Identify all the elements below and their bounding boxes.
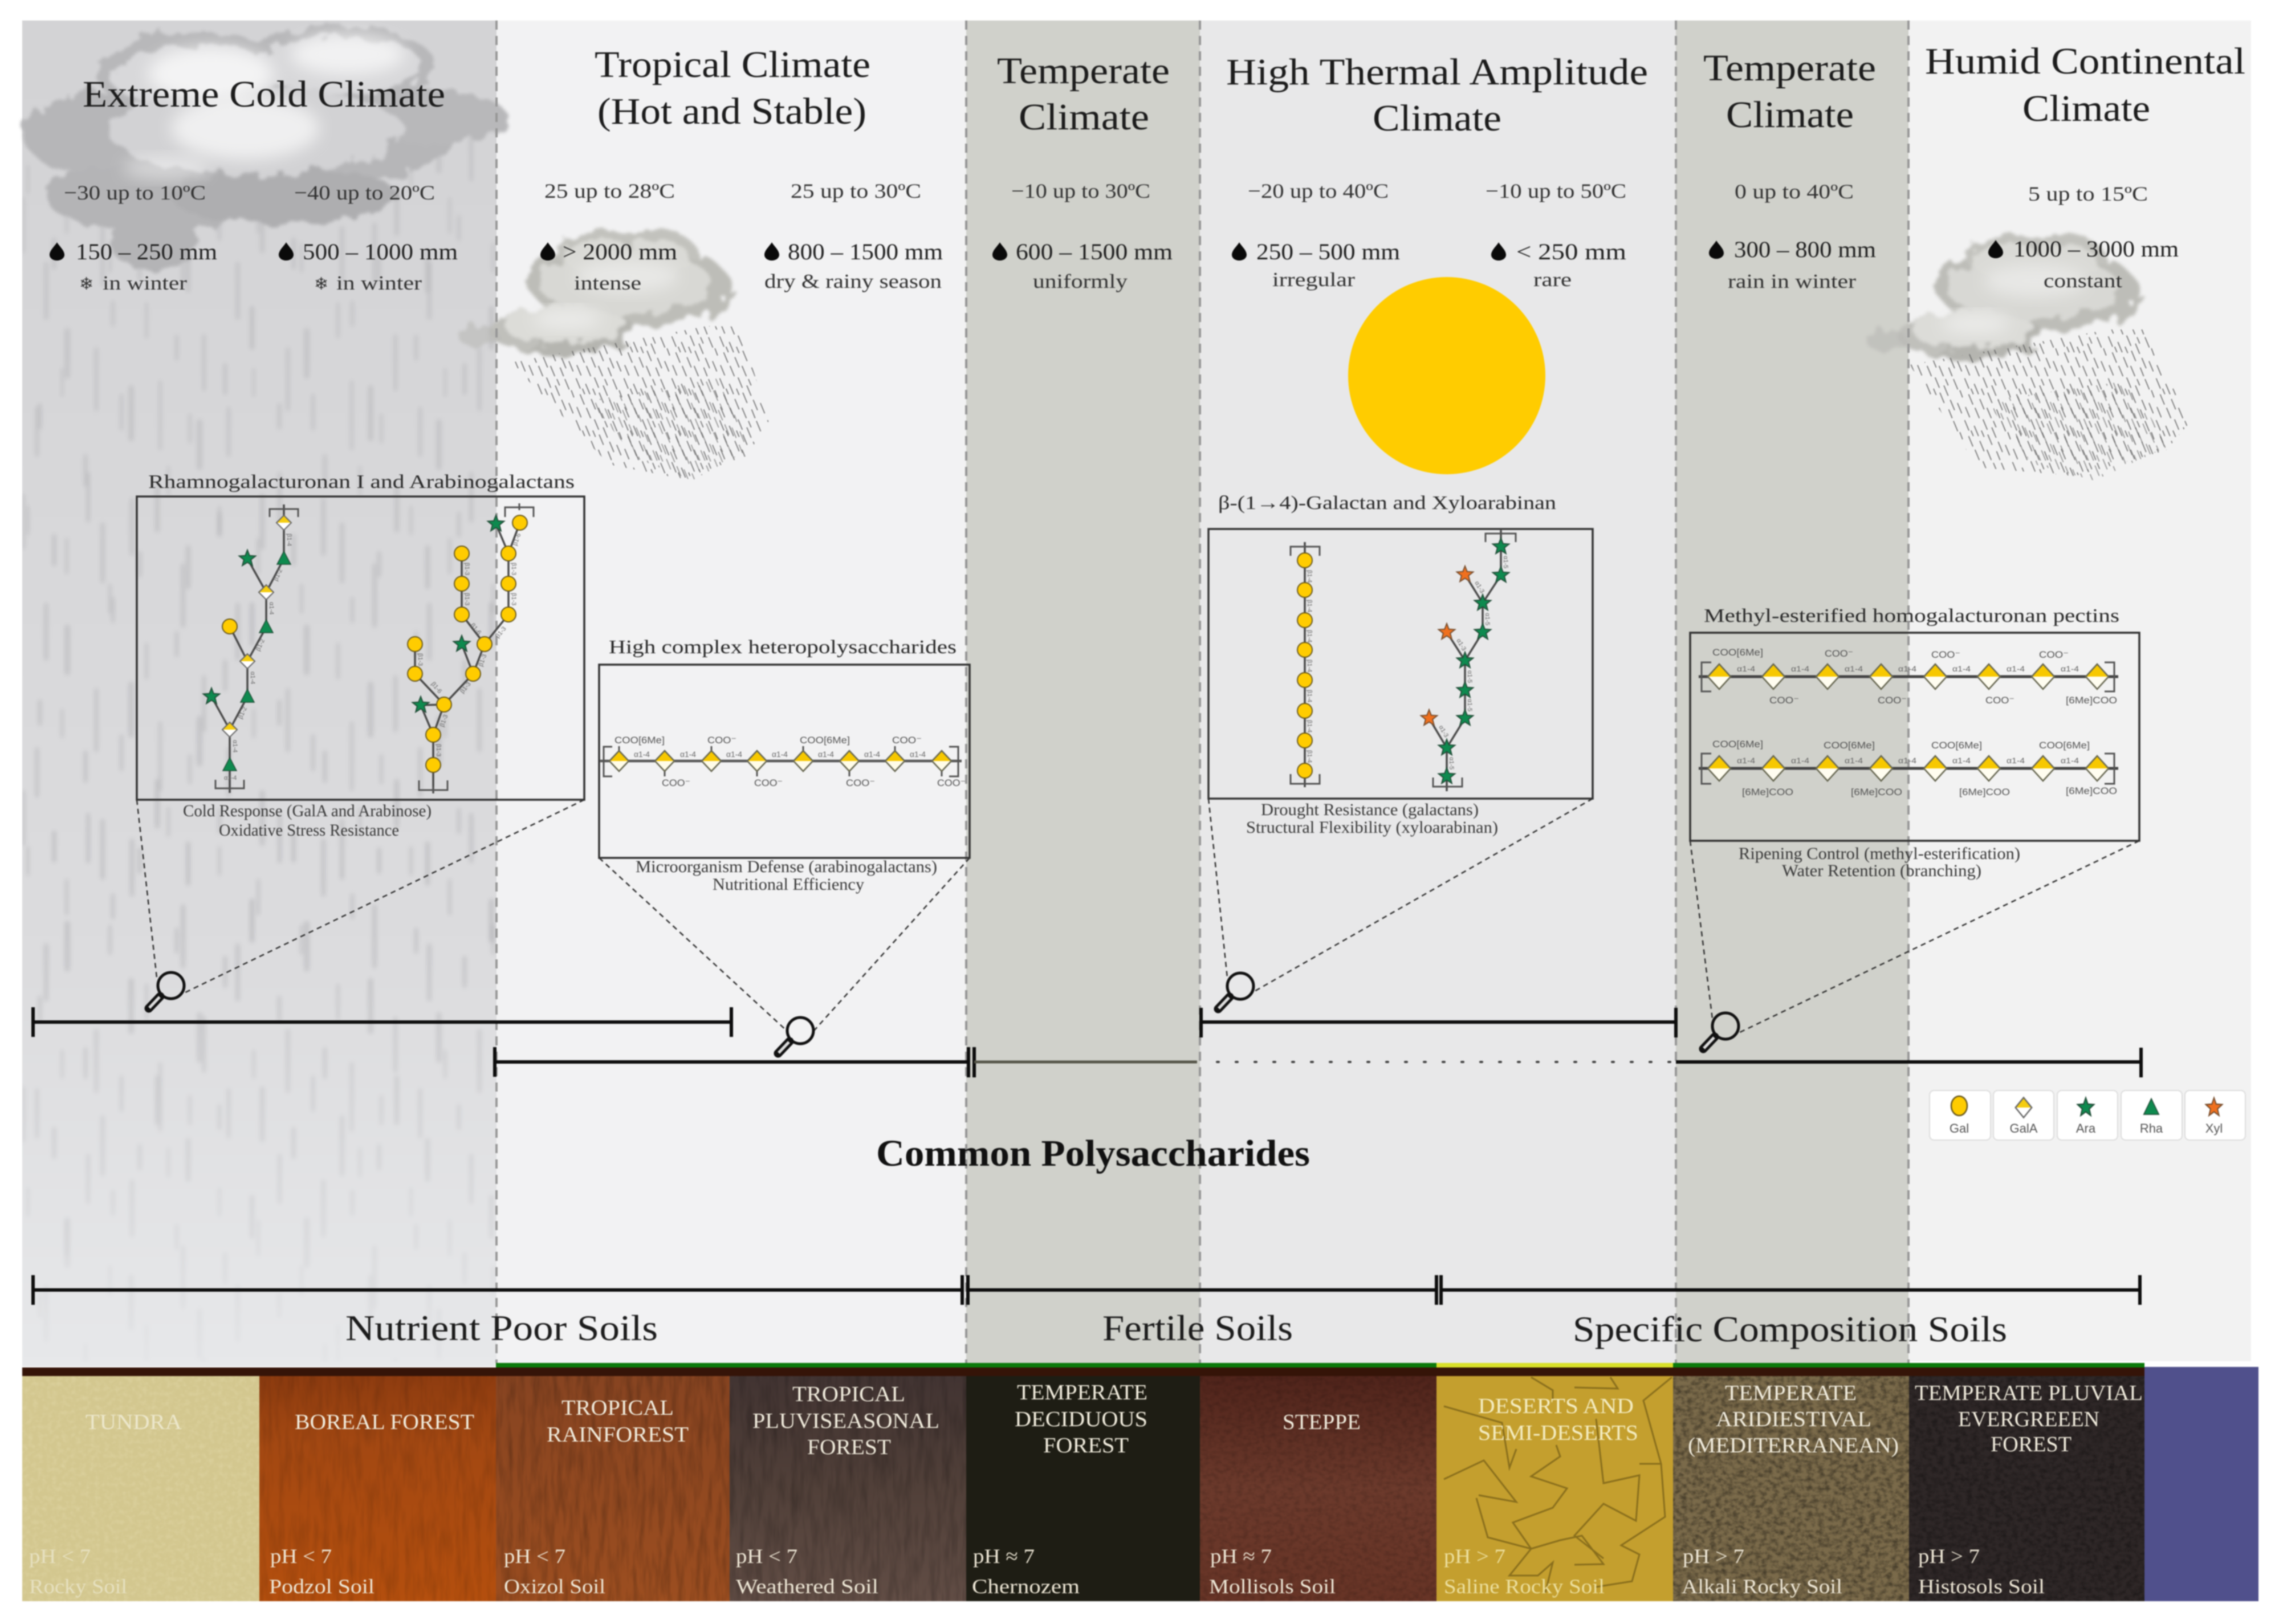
legend: Ara: Ara — [2076, 1121, 2096, 1135]
temperature range one: 25 up to 28ºC — [544, 180, 675, 202]
range bar: temperate grey — [972, 1047, 976, 1077]
biome name line two: DECIDUOUS — [1015, 1407, 1147, 1431]
chain: fully methyl-esterified: α1-4 — [1737, 756, 1755, 765]
chain: partially methyl-esterified: α1-4 — [1898, 664, 1916, 673]
chain: fully methyl-esterified: α1-4 — [2061, 756, 2079, 765]
text block: extreme cold climate — [50, 74, 458, 294]
caption: drought resistance: Drought Resistance (galactans) — [1261, 800, 1479, 819]
snow and rain streaks — [22, 114, 496, 1362]
glycan tree: rhamnogalacturonan: β1-2 — [237, 706, 249, 720]
chain: fully methyl-esterified: COO[6Me] — [1712, 739, 1763, 750]
chain: galactan: β1-4 — [1306, 720, 1313, 732]
biome name line one: TROPICAL — [792, 1382, 905, 1406]
panel: beta galactan and xyloarabinan — [1208, 493, 1593, 837]
chain: fully methyl-esterified: α1-4 — [1791, 756, 1809, 765]
glycan tree: arabinogalactan: β1-3 — [510, 593, 517, 605]
range bar: dotted section — [1217, 1061, 1676, 1063]
glycan tree: rhamnogalacturonan: α1-4 — [231, 740, 238, 752]
chain: eight galacturonic acid residues: COO⁻ — [707, 735, 736, 746]
heading: Methyl-esterified homogalacturonan pectins — [1704, 605, 2119, 626]
soil column: tundra — [22, 1376, 259, 1601]
chain: fully methyl-esterified: COO[6Me] — [1931, 740, 1982, 751]
note: rare: rare — [1533, 268, 1572, 291]
temperature range two: −10 up to 50ºC — [1486, 180, 1626, 202]
icon: water drop — [1491, 242, 1506, 261]
icon: humid continental rain cloud — [1867, 234, 2138, 359]
legend: Ara — [2057, 1090, 2118, 1140]
biome name line one: DESERTS AND — [1478, 1394, 1634, 1418]
chain: partially methyl-esterified: COO⁻ — [2039, 649, 2069, 660]
chain: galactan: β1-4 — [1306, 660, 1313, 672]
range bar: rhamnogalacturonan — [33, 1007, 731, 1037]
biome name: STEPPE — [1283, 1410, 1361, 1434]
precipitation one: 250 – 500 mm — [1256, 239, 1400, 264]
chain: eight galacturonic acid residues: COO⁻ — [892, 735, 922, 746]
biome name line one: TEMPERATE — [1017, 1381, 1147, 1405]
temperature range: −10 up to 30ºC — [1011, 180, 1150, 202]
pH: pH > 7 — [1918, 1545, 1980, 1568]
caption: ripening control: Ripening Control (methyl-esterification) — [1739, 844, 2020, 863]
soil column: temperate deciduous forest — [966, 1376, 1200, 1601]
glycan tree: rhamnogalacturonan: α1-4 — [268, 602, 275, 614]
soil type: Oxizol Soil — [504, 1575, 605, 1598]
chain: eight galacturonic acid residues: COO⁻ — [846, 778, 875, 788]
icon: water drop — [1709, 241, 1724, 259]
legend: Rha: Rha — [2140, 1121, 2163, 1135]
chain: partially methyl-esterified: α1-4 — [1845, 664, 1863, 673]
precipitation one: 150 – 250 mm — [76, 239, 217, 264]
heading: fertile soils: Fertile Soils — [1102, 1308, 1293, 1348]
soil type: Podzol Soil — [269, 1575, 375, 1598]
chain: partially methyl-esterified: α1-4 — [2007, 664, 2025, 673]
chain: galactan — [1291, 542, 1320, 787]
heading: temperate: Temperate — [1703, 47, 1876, 89]
chain: galactan: β1-4 — [1306, 570, 1313, 583]
icon: magnifier three — [1218, 973, 1254, 1009]
legend: Gal: Gal — [1950, 1121, 1969, 1135]
icon: water drop — [540, 242, 555, 261]
legend: Gal — [1930, 1090, 1991, 1140]
chain: eight galacturonic acid residues: COO[6Me] — [614, 735, 665, 746]
glycan tree: arabinogalactan — [408, 503, 534, 793]
biome name line three: (MEDITERRANEAN) — [1688, 1434, 1899, 1458]
note: intense: intense — [574, 272, 641, 294]
icon: water drop — [992, 242, 1007, 261]
chain: fully methyl-esterified: [6Me]COO — [1742, 787, 1793, 797]
biome name line three: FOREST — [1043, 1434, 1129, 1458]
pH: pH < 7 — [736, 1545, 797, 1568]
chain: eight galacturonic acid residues — [600, 735, 966, 788]
temperature range two: 25 up to 30ºC — [791, 180, 921, 202]
soil column: deserts and semi-deserts — [1436, 1376, 1673, 1601]
pH: pH < 7 — [504, 1545, 565, 1568]
chain: partially methyl-esterified: COO⁻ — [1931, 649, 1960, 660]
icon: water drop — [1988, 240, 2003, 258]
heading: Rhamnogalacturonan I and Arabinogalactans — [148, 471, 575, 493]
glycan tree: arabinogalactan: β1-3 — [494, 625, 508, 640]
panel: humid continental background — [1908, 21, 2251, 1361]
chain: eight galacturonic acid residues: α1-4 — [910, 750, 926, 759]
panel: temperate climate background — [966, 21, 1200, 1363]
legend: monosaccharide symbols — [1930, 1090, 2245, 1140]
range bar: heteropolysaccharides — [495, 1047, 968, 1077]
chain: fully methyl-esterified: α1-4 — [1952, 756, 1971, 765]
tree: xyloarabinan: α1-5 — [1448, 757, 1455, 770]
glycan tree: arabinogalactan: β1-6 — [469, 622, 482, 636]
legend: Xyl: Xyl — [2205, 1121, 2223, 1135]
chain: eight galacturonic acid residues: α1-4 — [726, 750, 742, 759]
soil column: boreal forest — [259, 1376, 496, 1601]
caption: cold response: Cold Response (GalA and Arabinose) — [183, 801, 432, 820]
heading: climate: Climate — [1373, 97, 1501, 139]
chain: fully methyl-esterified: α1-4 — [1898, 756, 1916, 765]
tree: xyloarabinan: α1-3 — [1437, 724, 1450, 739]
frame — [1690, 633, 2139, 841]
zoom lines: second panel — [599, 858, 970, 1031]
chain: eight galacturonic acid residues: α1-4 — [818, 750, 834, 759]
organic soil band — [22, 1367, 2144, 1376]
text block: tropical climate — [540, 44, 943, 294]
caption: oxidative stress: Oxidative Stress Resistance — [219, 821, 399, 840]
biome name line one: TEMPERATE — [1725, 1381, 1857, 1405]
temperature range: 5 up to 15ºC — [2028, 182, 2148, 205]
zoom lines: fourth panel — [1690, 841, 2139, 1033]
chain: fully methyl-esterified: α1-4 — [2007, 756, 2025, 765]
soil cracks — [1444, 1377, 1672, 1593]
panel: second temperate climate background — [1676, 21, 1908, 1363]
precipitation: 300 – 800 mm — [1734, 237, 1876, 262]
glycan tree: arabinogalactan: β1-3 — [463, 593, 470, 605]
range bar: galactan — [1201, 1008, 1676, 1037]
heading: β-(1→4)-Galactan and Xyloarabinan — [1218, 493, 1556, 514]
glycan tree: rhamnogalacturonan: β1-4 — [286, 534, 292, 546]
icon: tropical rain cloud — [459, 229, 730, 355]
chain: partially methyl-esterified: COO⁻ — [1985, 695, 2014, 706]
heading: climate: Climate — [1726, 94, 1854, 136]
heading: tropical climate: Tropical Climate — [595, 44, 870, 86]
chain: partially methyl-esterified: α1-4 — [1737, 664, 1755, 673]
note: in winter: in winter — [336, 272, 422, 294]
note: irregular: irregular — [1272, 268, 1355, 291]
chain: partially methyl-esterified: [6Me]COO — [2066, 695, 2117, 706]
precipitation one: > 2000 mm — [563, 239, 677, 264]
chain: fully methyl-esterified — [1699, 739, 2118, 797]
glycan tree: rhamnogalacturonan — [204, 504, 298, 793]
pH: pH > 7 — [1444, 1545, 1505, 1568]
panel: methyl-esterified homogalacturonan pectins — [1690, 605, 2139, 880]
glycan tree: arabinogalactan: β1-6 — [512, 532, 522, 547]
chain: partially methyl-esterified: COO⁻ — [1825, 648, 1853, 659]
biome name: BOREAL FOREST — [295, 1410, 474, 1434]
icon: extreme cold storm cloud — [24, 27, 507, 270]
heading: climate: Climate — [2022, 88, 2150, 129]
chain: partially methyl-esterified: α1-4 — [2061, 664, 2079, 673]
chain: fully methyl-esterified: [6Me]COO — [1959, 787, 2010, 797]
soil column: tropical pluviseasonal forest — [730, 1376, 966, 1601]
caption: nutritional efficiency: Nutritional Efficiency — [713, 875, 864, 894]
icon: snowflake: ❄ — [79, 274, 93, 294]
chain: galactan: β1-4 — [1306, 690, 1313, 702]
soil column: temperate pluvial evergreen forest — [1909, 1376, 2144, 1601]
rain: humid continental — [1910, 329, 2191, 481]
range bar: fertile soils — [968, 1275, 1436, 1305]
precipitation: 1000 – 3000 mm — [2013, 236, 2179, 262]
heading: common polysaccharides: Common Polysaccharides — [876, 1133, 1310, 1174]
chain: partially methyl-esterified: COO⁻ — [1878, 695, 1907, 706]
panel: tropical climate background — [496, 21, 966, 1363]
tree: xyloarabinan: α1-5 — [1466, 670, 1473, 683]
pH: pH < 7 — [270, 1545, 332, 1568]
glycan tree: rhamnogalacturonan: α1-4 — [249, 671, 256, 684]
chain: partially methyl-esterified: COO[6Me] — [1712, 647, 1763, 658]
chain: fully methyl-esterified: [6Me]COO — [2066, 785, 2117, 796]
glycan tree: arabinogalactan: β1-3 — [459, 681, 473, 695]
chain: eight galacturonic acid residues: COO⁻ — [662, 778, 690, 788]
zoom lines: first panel — [137, 800, 584, 993]
legend: GalA: GalA — [2010, 1121, 2038, 1135]
pH: pH < 7 — [29, 1545, 91, 1568]
frame — [599, 665, 970, 858]
caption: water retention: Water Retention (branching) — [1782, 861, 1981, 880]
tree: xyloarabinan: α1-3 — [1455, 637, 1467, 652]
chain: eight galacturonic acid residues: α1-4 — [772, 750, 788, 759]
vegetation strip: yellow — [1436, 1363, 1673, 1367]
chain: eight galacturonic acid residues: α1-4 — [864, 750, 880, 759]
precipitation two: 800 – 1500 mm — [788, 239, 943, 264]
precipitation two: 500 – 1000 mm — [303, 239, 458, 264]
precipitation two: < 250 mm — [1516, 239, 1626, 264]
soil type: Saline Rocky Soil — [1444, 1575, 1605, 1598]
biome name: TUNDRA — [86, 1410, 182, 1434]
soil type: Alkali Rocky Soil — [1682, 1575, 1842, 1598]
icon: water drop — [764, 242, 779, 261]
temperature range two: −40 up to 20ºC — [294, 181, 435, 204]
chain: fully methyl-esterified: α1-4 — [1845, 756, 1863, 765]
zoom lines: third panel — [1208, 799, 1593, 992]
icon: water drop — [279, 242, 294, 261]
panel: extreme cold climate background — [22, 21, 496, 1366]
biome name line two: PLUVISEASONAL — [752, 1409, 939, 1433]
biome name line two: RAINFOREST — [547, 1423, 689, 1447]
biome name line one: TROPICAL — [561, 1396, 674, 1420]
glycan tree: arabinogalactan: β1-3 — [439, 714, 449, 728]
tree: xyloarabinan: α1-3 — [1473, 580, 1486, 595]
biome name line three: FOREST — [807, 1435, 891, 1459]
glycan tree: arabinogalactan: β1-3 — [463, 563, 470, 575]
pH: pH > 7 — [1683, 1545, 1744, 1568]
biome name line three: FOREST — [1991, 1432, 2071, 1456]
soil column: steppe — [1200, 1376, 1436, 1601]
glycan tree: arabinogalactan: β1-3 — [510, 563, 517, 575]
temperature range: 0 up to 40ºC — [1735, 180, 1854, 203]
heading: High complex heteropolysaccharides — [609, 637, 957, 658]
glycan tree: arabinogalactan: β1-3 — [478, 653, 488, 667]
note: dry and rainy season: dry & rainy season — [764, 270, 942, 292]
text block: second temperate climate — [1703, 47, 1876, 292]
frame — [137, 496, 584, 800]
glycan tree: arabinogalactan: β1-3 — [435, 744, 442, 756]
precipitation: 600 – 1500 mm — [1016, 239, 1173, 264]
pH: pH ≈ 7 — [1210, 1545, 1272, 1568]
soil type: Chernozem — [972, 1575, 1080, 1598]
heading: humid continental: Humid Continental — [1925, 40, 2245, 82]
glycan tree: rhamnogalacturonan: β1-2 — [255, 638, 266, 652]
chain: partially methyl-esterified: α1-4 — [1791, 664, 1809, 673]
rain: tropical — [511, 326, 769, 481]
panel: rhamnogalacturonan I and arabinogalactans — [137, 471, 584, 840]
icon: magnifier four — [1703, 1013, 1739, 1049]
note: rain in winter: rain in winter — [1728, 270, 1856, 292]
legend: GalA — [1993, 1090, 2054, 1140]
text block: temperate climate — [992, 50, 1173, 292]
vegetation strip: green — [496, 1363, 1436, 1367]
heading: specific composition soils: Specific Composition Soils — [1573, 1309, 2007, 1349]
heading: extreme cold climate: Extreme Cold Climate — [83, 74, 445, 115]
biome name line two: SEMI-DESERTS — [1478, 1421, 1638, 1445]
biome name line two: ARIDIESTIVAL — [1716, 1407, 1871, 1431]
text block: humid continental climate — [1925, 40, 2245, 292]
tree: xyloarabinan — [1421, 530, 1516, 791]
pH: pH ≈ 7 — [973, 1545, 1035, 1568]
range bar: temperate thin line — [974, 1060, 1197, 1064]
heading: climate: Climate — [1019, 96, 1149, 138]
legend: Rha — [2121, 1090, 2182, 1140]
chain: eight galacturonic acid residues: COO⁻ — [937, 778, 966, 788]
panel: high complex heteropolysaccharides — [599, 637, 970, 894]
soil type: Weathered Soil — [736, 1575, 878, 1598]
chain: partially methyl-esterified: COO⁻ — [1769, 695, 1799, 706]
chain: eight galacturonic acid residues: COO[6Me] — [800, 735, 850, 746]
icon: snowflake: ❄ — [314, 274, 328, 294]
icon: water drop — [1232, 242, 1247, 261]
chain: galactan: β1-4 — [1306, 630, 1313, 642]
vegetation strip: green right — [1673, 1363, 2144, 1367]
chain: eight galacturonic acid residues: COO⁻ — [754, 778, 783, 788]
range bar: nutrient poor soils — [33, 1275, 962, 1305]
chain: partially methyl-esterified: α1-4 — [1952, 664, 1971, 673]
frame — [1208, 529, 1593, 799]
temperature range one: −20 up to 40ºC — [1248, 180, 1389, 202]
chain: fully methyl-esterified: [6Me]COO — [1851, 787, 1902, 797]
chain: fully methyl-esterified: COO[6Me] — [2039, 740, 2090, 751]
soil type: Mollisols Soil — [1209, 1575, 1336, 1598]
panel: high thermal amplitude background — [1200, 21, 1676, 1363]
heading: temperate climate: Temperate — [997, 50, 1170, 92]
soil column: temperate aridiestival mediterranean — [1673, 1376, 1909, 1601]
chain: eight galacturonic acid residues: α1-4 — [634, 750, 650, 759]
icon: magnifier one — [149, 972, 184, 1008]
biome name line two: EVERGREEEN — [1958, 1407, 2099, 1431]
legend: Xyl — [2185, 1090, 2245, 1140]
glycan tree: arabinogalactan: β1-3 — [417, 653, 424, 666]
chain: galactan: β1-4 — [1306, 600, 1313, 612]
soil column: tropical rainforest — [496, 1376, 730, 1601]
icon: magnifier two — [778, 1017, 813, 1053]
soil type: Histosols Soil — [1918, 1575, 2045, 1598]
tree: xyloarabinan: α1-5 — [1466, 699, 1473, 711]
chain: galactan: β1-4 — [1306, 750, 1313, 763]
tree: xyloarabinan: α1-5 — [1484, 613, 1491, 625]
tree: xyloarabinan: α1-5 — [1502, 556, 1509, 568]
soil type: Rocky Soil — [29, 1575, 127, 1598]
chain: fully methyl-esterified: COO[6Me] — [1824, 740, 1875, 751]
heading: high thermal amplitude: High Thermal Amplitude — [1226, 51, 1648, 93]
note: in winter: in winter — [103, 272, 187, 294]
glycan tree: arabinogalactan: β1-6 — [430, 681, 443, 695]
note: uniformly: uniformly — [1033, 270, 1128, 292]
icon: sun — [1348, 277, 1545, 474]
glycan tree: rhamnogalacturonan: α1-4 — [224, 775, 237, 782]
temperature range one: −30 up to 10ºC — [64, 181, 206, 204]
heading: nutrient poor soils: Nutrient Poor Soils — [345, 1308, 658, 1348]
caption: structural flexibility: Structural Flexibility (xyloarabinan) — [1246, 818, 1498, 837]
icon: water drop — [50, 242, 64, 261]
purple end block — [2144, 1367, 2258, 1601]
caption: microorganism defense: Microorganism Defense (arabinogalactans) — [636, 857, 937, 876]
chain: partially methyl-esterified — [1699, 647, 2118, 706]
range bar: homogalacturonan — [1676, 1048, 2141, 1077]
range bar: specific composition soils — [1441, 1275, 2140, 1305]
chain: eight galacturonic acid residues: α1-4 — [680, 750, 696, 759]
text block: high thermal amplitude climate — [1226, 51, 1648, 291]
note: constant: constant — [2044, 270, 2122, 292]
heading: hot and stable: (Hot and Stable) — [597, 91, 866, 132]
biome name line one: TEMPERATE PLUVIAL — [1915, 1381, 2143, 1405]
glycan tree: rhamnogalacturonan: β1-2 — [272, 568, 284, 582]
